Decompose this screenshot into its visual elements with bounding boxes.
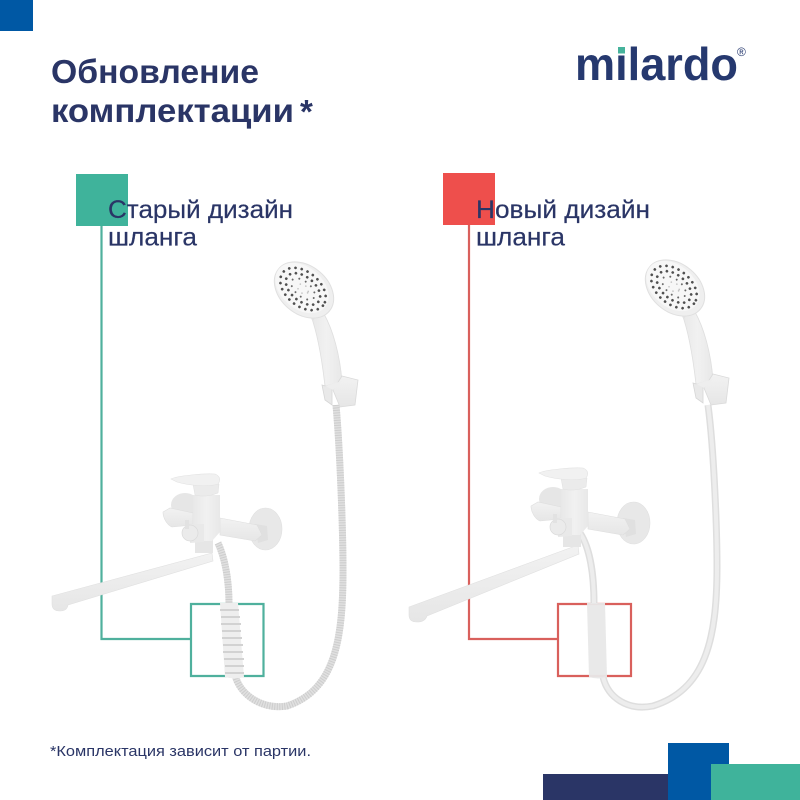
hose: smooth new xyxy=(580,405,717,707)
label: new design xyxy=(476,196,650,252)
shower head xyxy=(263,250,358,407)
title: * xyxy=(300,93,313,130)
panel: old hose design xyxy=(52,174,358,707)
hose guard: ribbed xyxy=(220,603,244,678)
faucet body xyxy=(163,474,282,553)
hose guard: smooth xyxy=(587,603,607,678)
label: new design: шланга xyxy=(476,224,565,252)
colour square: old xyxy=(76,174,128,226)
title: комплектации xyxy=(51,92,294,129)
corner blocks: bottom right xyxy=(543,743,800,800)
shower head xyxy=(634,248,729,405)
faucet body xyxy=(531,468,650,547)
corner block: top left xyxy=(0,0,33,31)
label: old design: шланга xyxy=(108,224,197,252)
leader line and highlight box: old xyxy=(102,226,264,676)
spout xyxy=(409,545,579,622)
logo: milardo: milardo xyxy=(575,38,738,90)
title xyxy=(51,53,313,130)
colour square: new xyxy=(443,173,495,225)
footnote: *Комплектация зависит от партии. xyxy=(50,743,311,760)
spout xyxy=(52,553,213,611)
leader line and highlight box: new xyxy=(469,225,631,676)
panel: new hose design xyxy=(409,173,729,707)
title: Обновление xyxy=(51,53,259,90)
logo: milardo: ® xyxy=(737,45,746,59)
label: new design: Новый дизайн xyxy=(476,196,650,224)
hose: ribbed old xyxy=(218,405,343,707)
label: old design: Старый дизайн xyxy=(108,196,293,224)
label: old design xyxy=(108,196,293,252)
